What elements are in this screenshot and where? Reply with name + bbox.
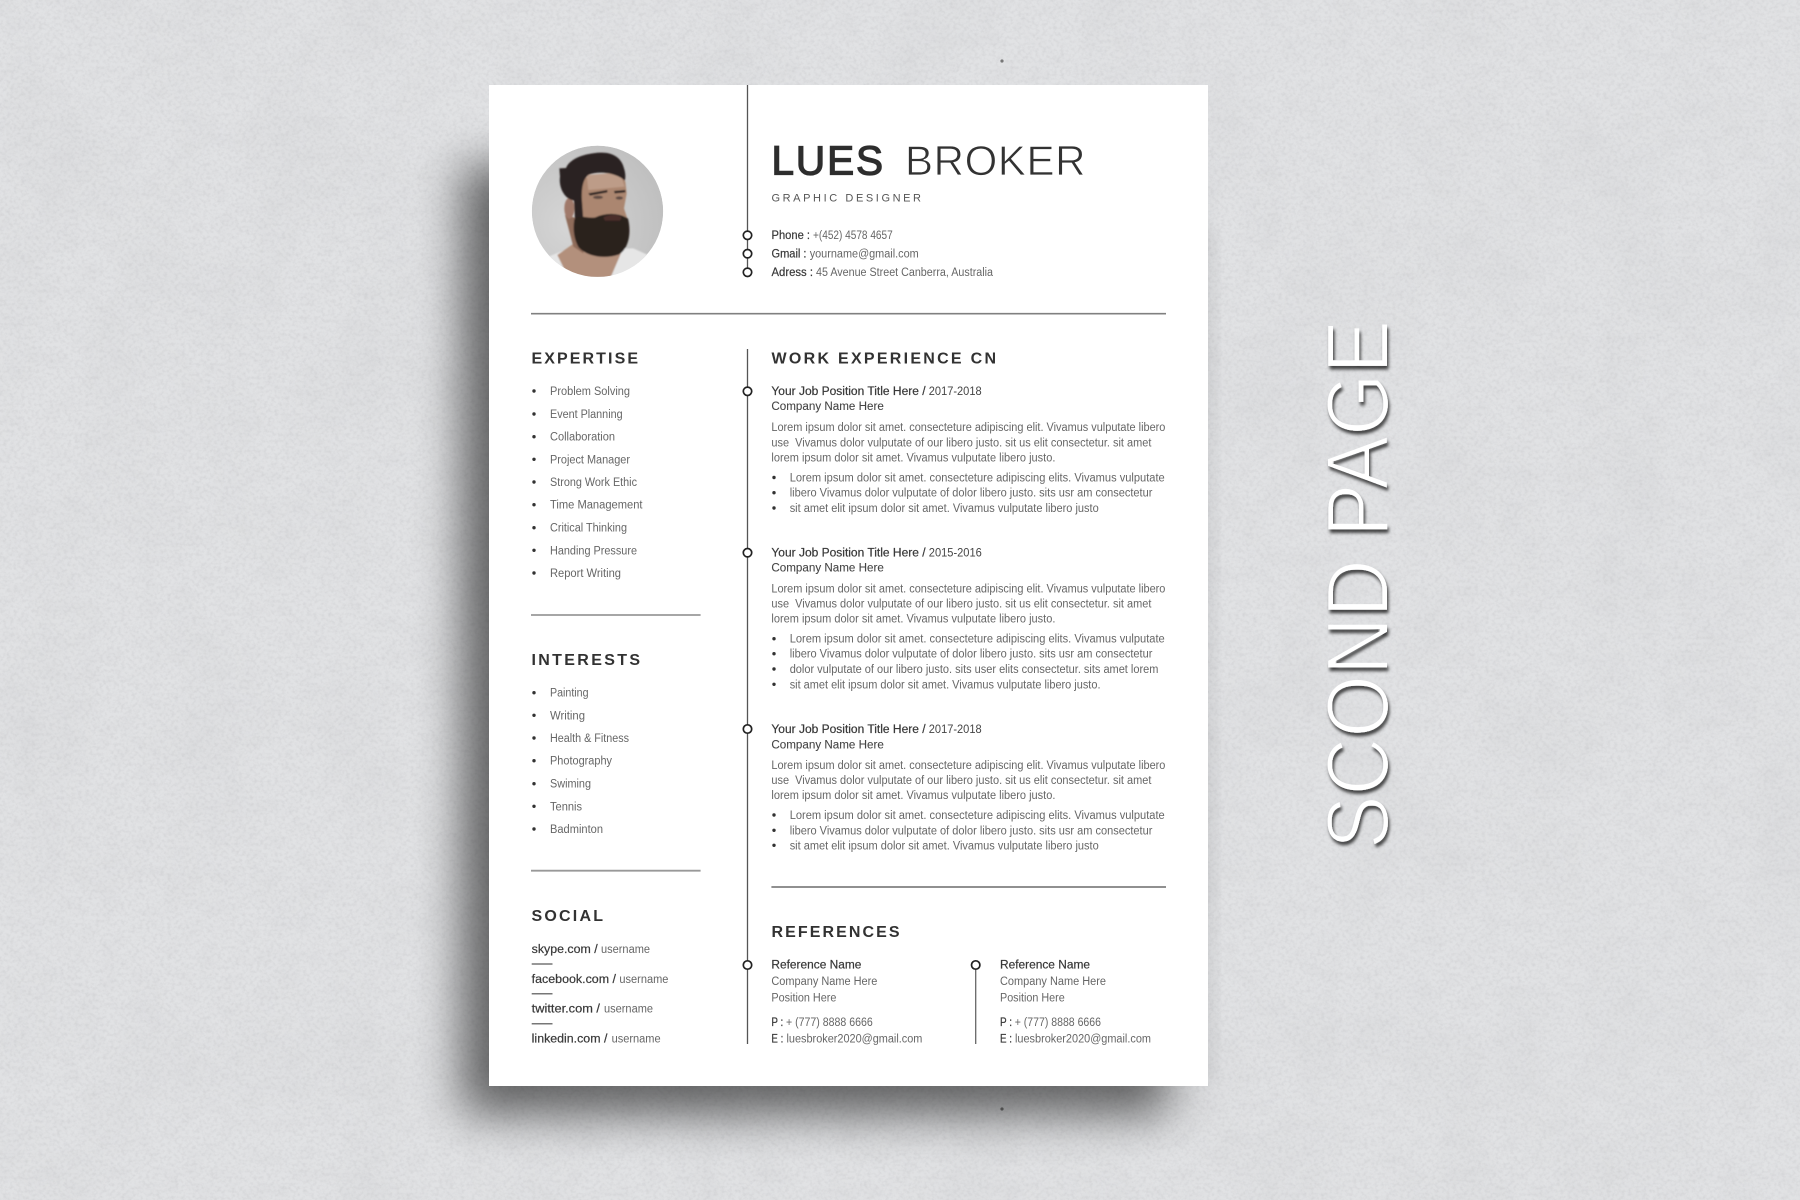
job entry 2: Your Job Position Title Here / xyxy=(771,548,926,560)
reference 2: Company Name Here xyxy=(1000,976,1106,988)
job entry 2: Company Name Here xyxy=(771,563,884,575)
reference 1: luesbroker2020@gmail.com xyxy=(786,1034,922,1046)
name xyxy=(772,137,1086,184)
job entry 2: use Vivamus dolor vulputate of our libero justo. sit us elit consectetur. sit amet xyxy=(771,598,1152,610)
social links: linkedin.com / xyxy=(532,1034,608,1046)
contact list: +(452) 4578 4657 xyxy=(813,230,893,242)
job title: GRAPHIC DESIGNER xyxy=(772,192,921,204)
job entry 3: Lorem ipsum dolor sit amet. consecteture adipiscing elits. Vivamus vulputate xyxy=(790,810,1165,822)
job entry 3 xyxy=(743,724,1165,852)
reference 2: Position Here xyxy=(1000,993,1065,1005)
job entry 1: use Vivamus dolor vulputate of our libero justo. sit us elit consectetur. sit amet xyxy=(771,437,1152,449)
interests list: Health & Fitness xyxy=(550,733,629,745)
job entry 1: Your Job Position Title Here / xyxy=(771,386,926,398)
interests list: Photography xyxy=(550,756,612,768)
job entry 2: libero Vivamus dolor vulputate of dolor libero justo. sits usr am consectetur xyxy=(790,649,1153,661)
expertise list: Project Manager xyxy=(550,454,630,466)
job entry 3: Company Name Here xyxy=(771,739,884,751)
contact list xyxy=(743,230,994,279)
expertise list: Time Management xyxy=(550,500,643,512)
expertise list: Problem Solving xyxy=(550,386,630,398)
job entry 3: 2017-2018 xyxy=(929,724,982,736)
social links: username xyxy=(612,1034,661,1046)
reference 1: Company Name Here xyxy=(771,976,877,988)
interests list xyxy=(532,688,629,836)
job entry 1: libero Vivamus dolor vulputate of dolor libero justo. sits usr am consectetur xyxy=(790,488,1153,500)
expertise list: Report Writing xyxy=(550,568,621,580)
social links: skype.com / xyxy=(532,944,599,956)
job entry 3: lorem ipsum dolor sit amet. Vivamus vulputate libero justo. xyxy=(771,790,1055,802)
job entry 3: use Vivamus dolor vulputate of our libero justo. sit us elit consectetur. sit amet xyxy=(771,775,1152,787)
panel: interests xyxy=(532,652,640,836)
reference 1: P : xyxy=(771,1017,783,1029)
interests list: Painting xyxy=(550,688,588,700)
job entry 1: 2017-2018 xyxy=(929,386,982,398)
social links: twitter.com / xyxy=(532,1004,601,1016)
heading: interests: INTERESTS xyxy=(532,652,640,669)
reference 1: + (777) 8888 6666 xyxy=(786,1017,873,1029)
job entry 1: Lorem ipsum dolor sit amet. consecteture adipiscing elits. Vivamus vulputate xyxy=(790,472,1165,484)
job entry 1: Company Name Here xyxy=(771,401,884,413)
contact list: Phone : xyxy=(772,230,810,242)
panel: resume page xyxy=(489,85,1208,1086)
expertise list xyxy=(532,386,643,580)
contact list: 45 Avenue Street Canberra, Australia xyxy=(816,267,994,279)
expertise list: Strong Work Ethic xyxy=(550,477,637,489)
icon: portrait photo xyxy=(532,146,663,280)
panel: social xyxy=(532,908,668,1046)
reference 2: E : xyxy=(1000,1034,1012,1046)
expertise list: Event Planning xyxy=(550,409,623,421)
social links: username xyxy=(604,1004,653,1016)
contact list: Gmail : xyxy=(772,249,806,261)
heading: expertise: EXPERTISE xyxy=(532,350,638,368)
social links xyxy=(532,944,668,1046)
name: LUES xyxy=(772,137,883,183)
job entry 1: lorem ipsum dolor sit amet. Vivamus vulputate libero justo. xyxy=(771,452,1055,464)
expertise list: Handing Pressure xyxy=(550,545,637,557)
job entry 1 xyxy=(743,386,1165,515)
contact list: Adress : xyxy=(772,267,813,279)
reference 2 xyxy=(972,960,1151,1046)
reference 2: Reference Name xyxy=(1000,960,1090,972)
job entry 2 xyxy=(743,548,1165,691)
job entry 3: Lorem ipsum dolor sit amet. consecteture adipiscing elit. Vivamus vulputate libero xyxy=(771,760,1165,772)
social links: username xyxy=(619,974,668,986)
job entry 2: dolor vulputate of our libero justo. sits user elits consectetur. sits amet lorem xyxy=(790,664,1158,676)
reference 2: P : xyxy=(1000,1017,1012,1029)
name: BROKER xyxy=(905,137,1086,184)
reference 2: luesbroker2020@gmail.com xyxy=(1015,1034,1151,1046)
social links: facebook.com / xyxy=(532,974,617,986)
social links: username xyxy=(601,944,650,956)
job entry 1: sit amet elit ipsum dolor sit amet. Vivamus vulputate libero justo xyxy=(790,503,1099,515)
interests list: Writing xyxy=(550,710,585,722)
interests list: Tennis xyxy=(550,801,582,813)
vertical label: scond page: SCOND PAGE xyxy=(1308,320,1407,849)
contact list: yourname@gmail.com xyxy=(810,249,919,261)
reference 1: Position Here xyxy=(771,993,836,1005)
job entry 3: sit amet elit ipsum dolor sit amet. Vivamus vulputate libero justo xyxy=(790,840,1099,852)
reference 1 xyxy=(743,960,922,1046)
timeline vertical rules xyxy=(748,85,976,1044)
heading: social: SOCIAL xyxy=(532,908,603,925)
panel: expertise xyxy=(532,350,643,580)
job entry 3: libero Vivamus dolor vulputate of dolor libero justo. sits usr am consectetur xyxy=(790,825,1153,837)
reference 1: E : xyxy=(771,1034,783,1046)
interests list: Badminton xyxy=(550,824,603,836)
heading: work experience: WORK EXPERIENCE CN xyxy=(772,350,996,368)
reference 2: + (777) 8888 6666 xyxy=(1015,1017,1101,1029)
job entry 2: Lorem ipsum dolor sit amet. consecteture adipiscing elits. Vivamus vulputate xyxy=(790,634,1165,646)
job entry 2: sit amet elit ipsum dolor sit amet. Vivamus vulputate libero justo. xyxy=(790,679,1100,691)
reference 1: Reference Name xyxy=(771,960,861,972)
expertise list: Collaboration xyxy=(550,432,615,444)
interests list: Swiming xyxy=(550,779,591,791)
heading: references: REFERENCES xyxy=(772,924,900,941)
job entry 3: Your Job Position Title Here / xyxy=(771,724,926,736)
job entry 2: Lorem ipsum dolor sit amet. consecteture adipiscing elit. Vivamus vulputate libero xyxy=(771,584,1165,596)
expertise list: Critical Thinking xyxy=(550,523,627,535)
job entry 2: lorem ipsum dolor sit amet. Vivamus vulputate libero justo. xyxy=(771,614,1055,626)
job entry 1: Lorem ipsum dolor sit amet. consecteture adipiscing elit. Vivamus vulputate libero xyxy=(771,422,1165,434)
page drop shadow xyxy=(462,165,1216,1115)
job entry 2: 2015-2016 xyxy=(929,548,982,560)
